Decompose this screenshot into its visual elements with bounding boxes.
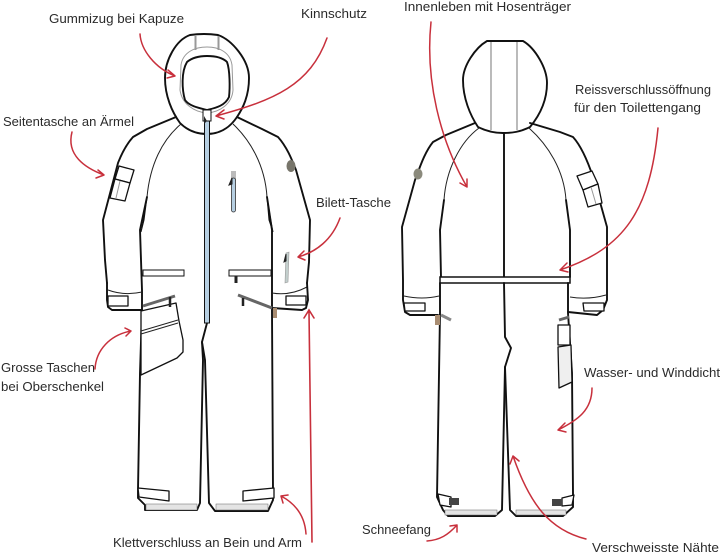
arrow: Seitentasche xyxy=(71,132,104,178)
arrow: Bilett-Tasche xyxy=(298,218,340,260)
label: Seitentasche an Ärmel: Seitentasche an Ärmel xyxy=(3,115,134,129)
back sleeve badge xyxy=(414,168,422,180)
arrow: Kinnschutz xyxy=(216,38,327,119)
front hood xyxy=(165,34,249,134)
label: Klettverschluss an Bein und Arm: Klettverschluss an Bein und Arm xyxy=(113,536,302,550)
arrow: Wasser- und Winddicht xyxy=(558,388,592,432)
waist pockets xyxy=(143,270,271,283)
front zipper xyxy=(203,110,211,323)
chest pocket xyxy=(229,171,236,212)
label: Reissverschlussöffnung: Reissverschlussöffnung xyxy=(575,83,711,97)
arrow: Reissverschluss xyxy=(560,128,658,272)
label: Schneefang: Schneefang xyxy=(362,523,431,537)
arrow: Innenleben xyxy=(430,22,467,187)
back body outline xyxy=(402,123,607,516)
arrow: Gummizug xyxy=(140,34,175,78)
arrow: Verschweisste Nähte xyxy=(510,456,586,539)
back leg cuffs xyxy=(438,494,574,515)
label: Reissverschlussöffnung: für den Toilettengang xyxy=(574,101,701,115)
back hood xyxy=(463,41,547,133)
back thigh pocket xyxy=(558,317,572,388)
arrow: Klettverschluss to arm xyxy=(304,310,314,542)
front body outline xyxy=(103,117,310,511)
right diagonal pocket xyxy=(238,295,277,318)
arrow: Schneefang xyxy=(427,525,457,541)
ticket pocket xyxy=(284,252,289,283)
thigh pocket xyxy=(141,296,183,375)
back view of snowsuit xyxy=(402,41,607,516)
label: Gummizug bei Kapuze: Gummizug bei Kapuze xyxy=(49,12,184,26)
label: Grosse Taschen bei Oberschenkel: Grosse Taschen xyxy=(1,361,95,375)
label: Innenleben mit Hosenträger: Innenleben mit Hosenträger xyxy=(404,0,571,14)
label: Wasser- und Winddicht: Wasser- und Winddicht xyxy=(584,366,720,380)
arrow: Grosse Taschen xyxy=(95,328,131,369)
arrow: Klettverschluss to leg xyxy=(281,495,306,534)
label: Grosse Taschen bei Oberschenkel: bei Oberschenkel xyxy=(1,380,104,394)
front view of snowsuit xyxy=(103,34,310,511)
label: Kinnschutz: Kinnschutz xyxy=(301,7,367,21)
front leg cuffs xyxy=(138,488,274,510)
back small tab xyxy=(435,315,451,325)
label: Grosse Taschen bei Oberschenkel xyxy=(1,361,104,394)
label: Bilett-Tasche: Bilett-Tasche xyxy=(316,196,391,210)
sleeve pocket xyxy=(110,166,134,201)
back sleeve pocket xyxy=(577,171,602,207)
sleeve badge xyxy=(286,160,296,172)
label: Reissverschlussöffnung xyxy=(574,83,711,115)
